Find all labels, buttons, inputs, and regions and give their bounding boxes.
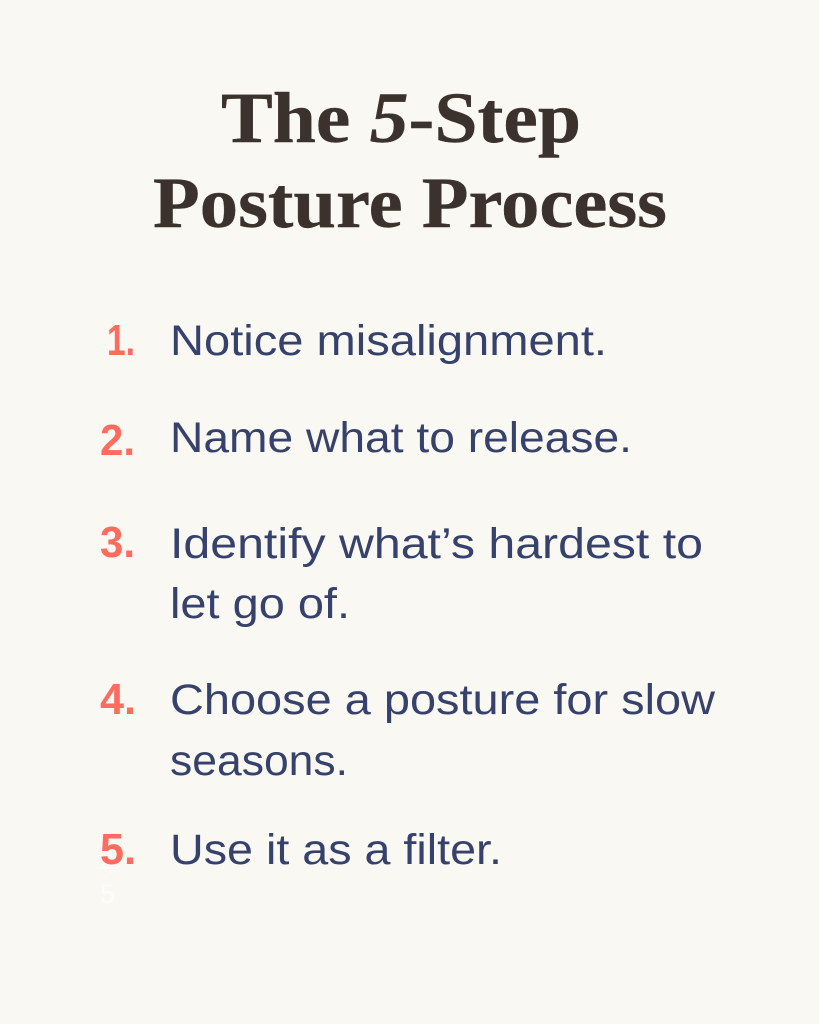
step 4 (100, 675, 716, 785)
step 2: 2. (100, 416, 135, 465)
faint ghost numerals: 4 (100, 849, 115, 879)
faint ghost numerals: 5 (100, 879, 115, 909)
step 4: seasons. (170, 737, 348, 785)
step 3: let go of. (170, 580, 350, 628)
title: Posture Process (153, 163, 667, 243)
step 1: 1. (107, 316, 135, 365)
step 1: Notice misalignment. (170, 317, 607, 365)
title: The 5-Step (221, 78, 581, 158)
step 3 (100, 518, 703, 628)
title (153, 78, 667, 243)
step 4: 4. (100, 675, 136, 724)
step 3: Identify what’s hardest to (170, 520, 703, 568)
step 5: 5. (100, 825, 136, 874)
step 4: Choose a posture for slow (170, 676, 716, 724)
step 2: Name what to release. (170, 414, 632, 462)
faint ghost numerals (100, 849, 115, 909)
step 3: 3. (100, 518, 135, 567)
step 5: Use it as a filter. (170, 826, 502, 874)
